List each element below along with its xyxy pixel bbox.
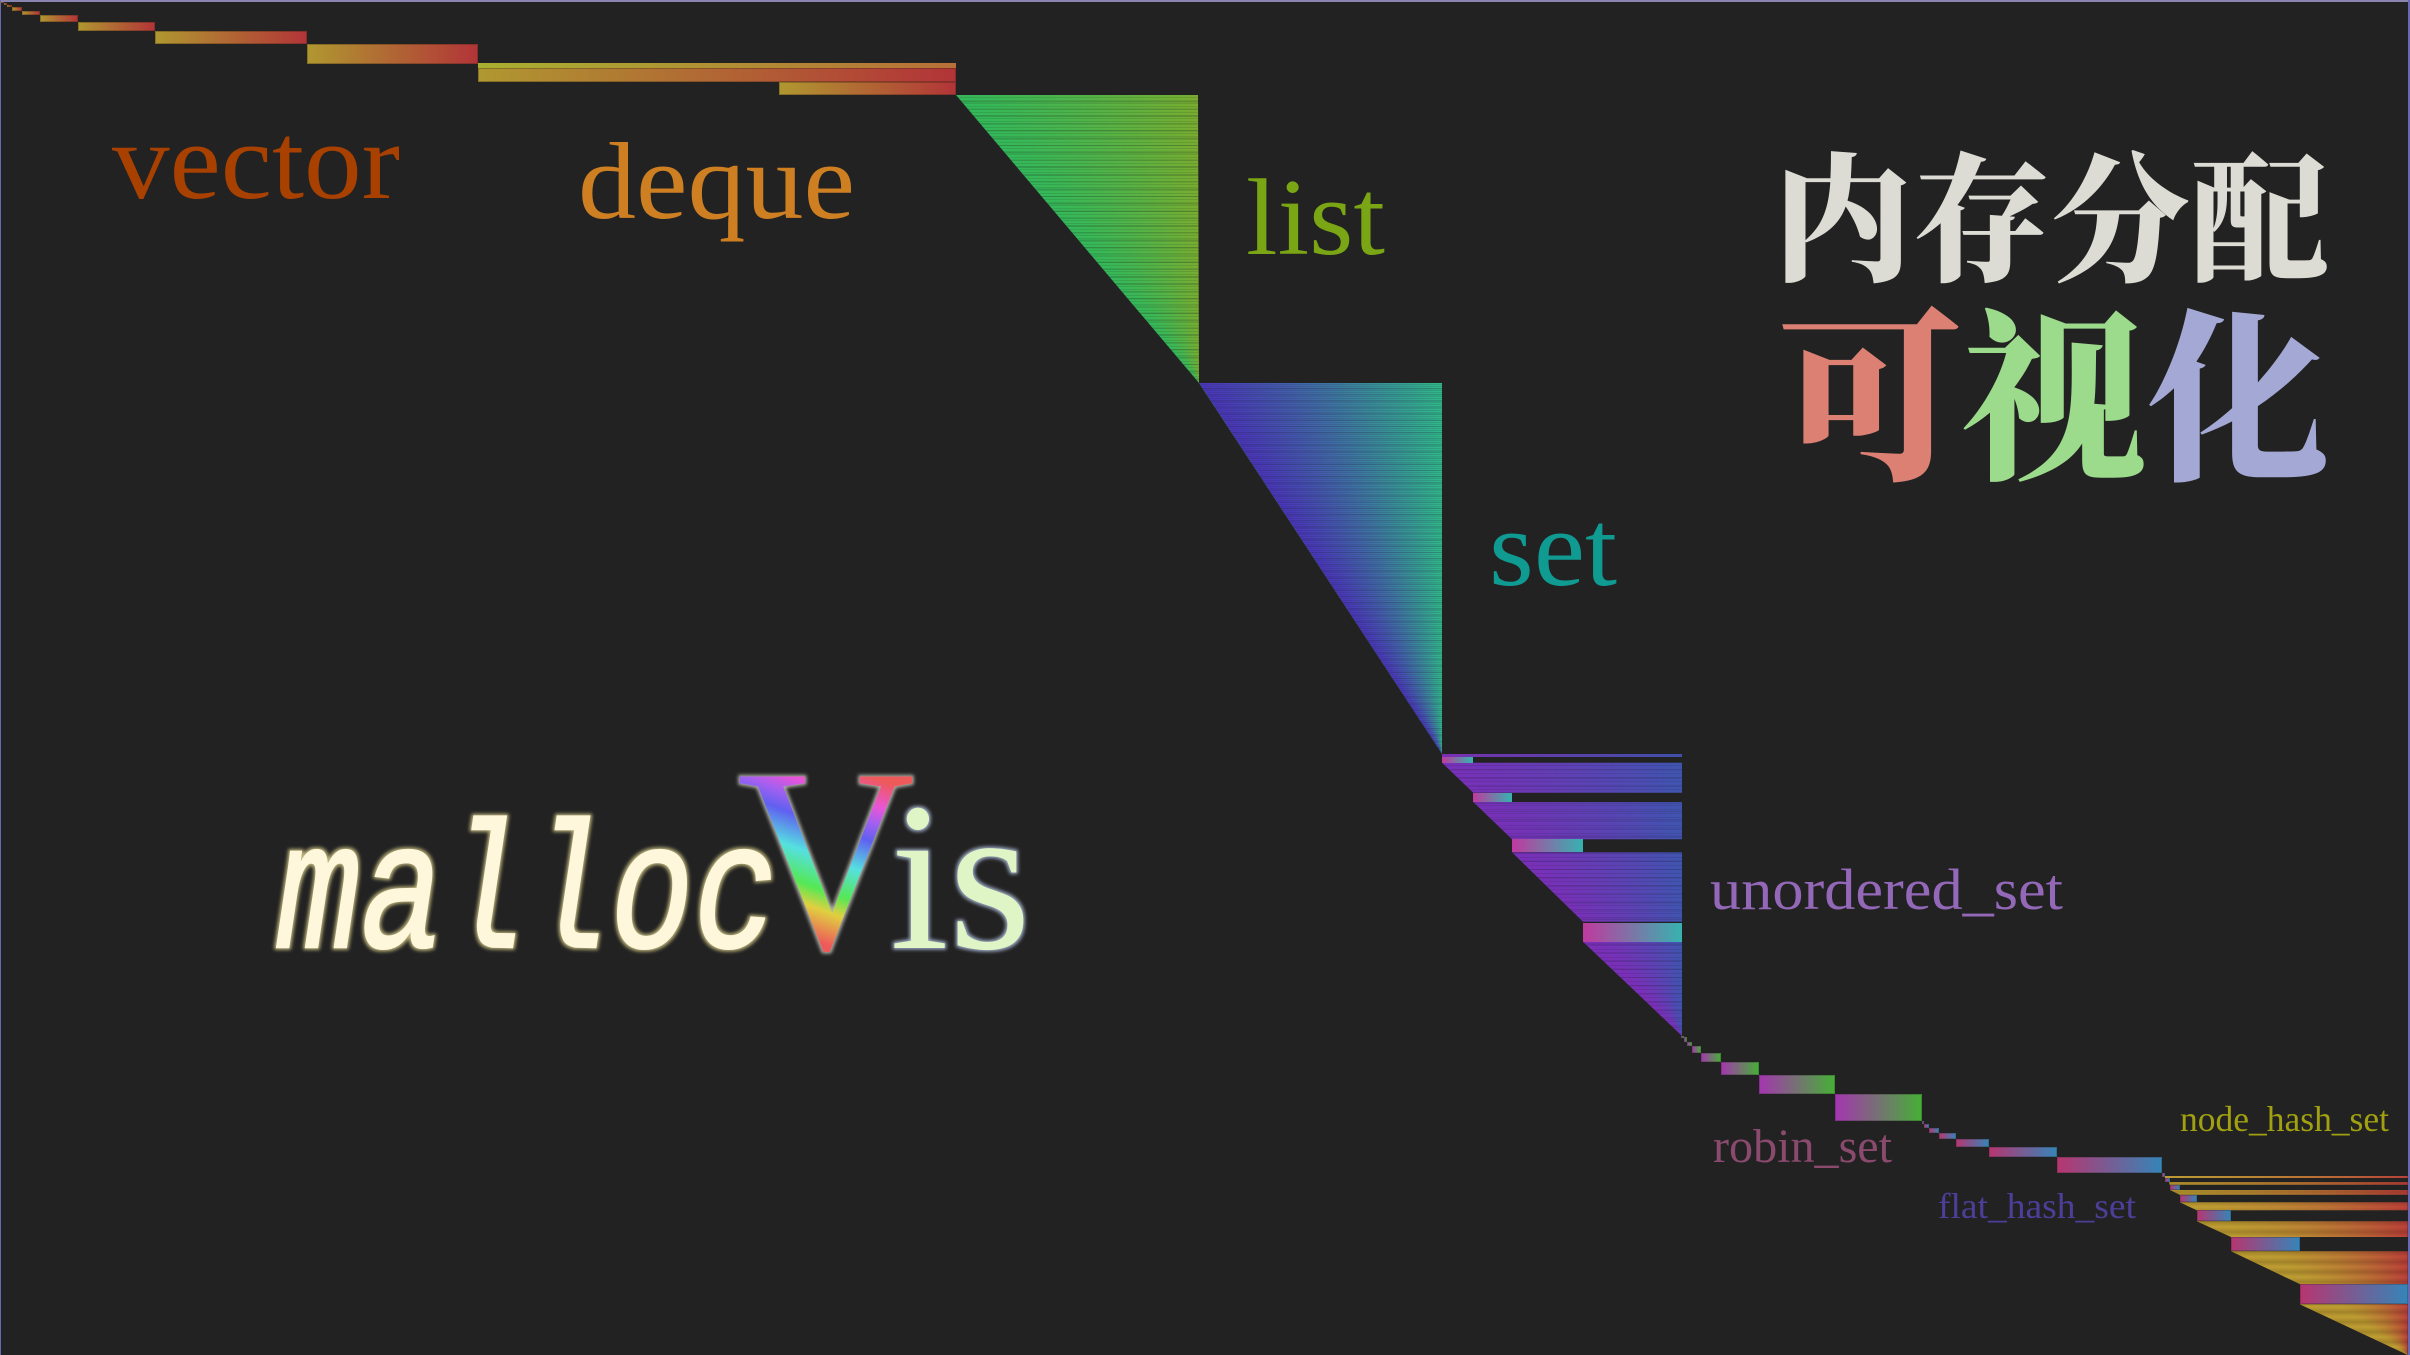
node_hash_set bucket 1 — [2162, 1173, 2165, 1177]
label: node_hash_set: node_hash_set — [2180, 1099, 2389, 1139]
label: robin_set: robin_set — [1713, 1120, 1893, 1173]
unordered_set bucket 2 — [1473, 793, 1512, 802]
label: vector: vector — [112, 101, 400, 222]
node_hash_set bucket 7 — [2300, 1284, 2408, 1304]
label: deque: deque — [578, 121, 855, 242]
label: unordered_set: unordered_set — [1710, 857, 2063, 922]
chart: set allocations triangle — [1199, 383, 1442, 754]
label: list: list — [1246, 157, 1385, 278]
node_hash_set bucket 5 — [2197, 1210, 2231, 1221]
logo part V: V — [737, 715, 915, 1005]
title character shi: 视 — [1962, 301, 2146, 505]
frame line right — [2408, 0, 2410, 1355]
label: set: set — [1489, 488, 1617, 609]
label: flat_hash_set: flat_hash_set — [1938, 1186, 2136, 1226]
frame line top — [0, 0, 2410, 2]
logo part malloc: malloc — [277, 798, 777, 1002]
node_hash_set bucket 3 — [2170, 1185, 2180, 1190]
unordered_set bucket 1 — [1442, 757, 1473, 763]
chart: list allocations triangle — [956, 95, 1199, 383]
chart: vector allocations — [1, 2, 478, 64]
unordered_set node rows — [1442, 754, 1682, 1036]
chart: unordered_set allocations — [1442, 754, 1682, 1036]
title character hua: 化 — [2146, 301, 2330, 505]
unordered_set thin row — [1442, 754, 1682, 757]
node_hash_set bucket 6 — [2231, 1237, 2300, 1251]
chart: node_hash_set allocations — [2162, 1173, 2408, 1355]
unordered_set bucket 4 — [1583, 923, 1682, 942]
title character ke: 可 — [1778, 301, 1962, 505]
frame line left — [0, 0, 1, 1355]
chart: deque allocations — [478, 63, 956, 95]
logo: mallocVis — [277, 715, 1031, 1005]
node_hash_set bucket 2 — [2165, 1178, 2170, 1182]
chart: robin_set allocations — [1681, 1036, 1922, 1121]
node_hash_set node rows — [2162, 1172, 2408, 1355]
node_hash_set bucket 4 — [2180, 1195, 2197, 1202]
chart: flat_hash_set allocations — [1922, 1121, 2162, 1173]
title line 2 — [1778, 301, 2330, 505]
logo part is: is — [890, 759, 1031, 994]
unordered_set bucket 3 — [1512, 839, 1583, 852]
title line 1: 内存分配 — [1773, 147, 2329, 301]
